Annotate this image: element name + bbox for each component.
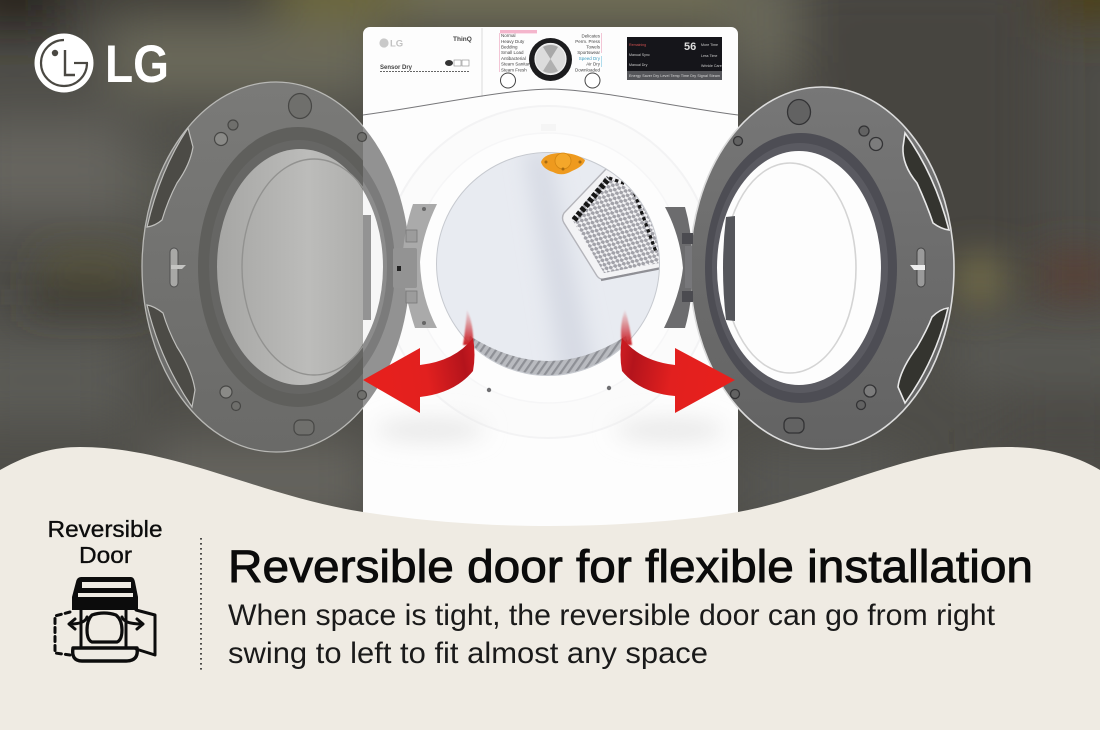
right cycle list: Sportswear bbox=[577, 50, 600, 55]
door catch bbox=[541, 124, 556, 131]
door surround bbox=[375, 106, 725, 442]
left button bbox=[500, 73, 516, 88]
display panel: Manual Dry bbox=[629, 63, 648, 67]
description text: swing to left to fit almost any space bbox=[228, 637, 708, 670]
ThinQ label: ThinQ bbox=[453, 36, 472, 43]
right cycle list bbox=[575, 33, 602, 72]
inner door tab bbox=[723, 216, 735, 321]
left door latch bbox=[170, 248, 186, 287]
left red arrow bbox=[363, 310, 474, 413]
right cycle list: Towels bbox=[586, 44, 601, 50]
dryer body bbox=[363, 27, 738, 537]
right cycle list: Speed Dry bbox=[579, 56, 601, 61]
left cycle list: Antibacterial bbox=[501, 56, 526, 61]
left cycle list: Bedding bbox=[501, 44, 518, 50]
left cycle list: Small Load bbox=[501, 50, 524, 55]
left cycle list bbox=[500, 30, 537, 72]
front screw right bbox=[607, 386, 611, 390]
LG wordmark: LG bbox=[105, 35, 169, 94]
display panel: Wrinkle Care bbox=[701, 64, 722, 68]
front screw left bbox=[487, 388, 491, 392]
bottom grille bbox=[470, 336, 627, 375]
orange sensor bbox=[541, 153, 585, 174]
right hinge bracket bbox=[664, 207, 693, 328]
right door bolts bbox=[730, 100, 882, 433]
right door bbox=[664, 87, 954, 449]
top grip bbox=[903, 133, 949, 230]
display panel: Energy Saver Dry Level Temp Time Dry Signal Steam bbox=[629, 74, 720, 78]
left door part over dryer bbox=[363, 126, 408, 408]
lint filter bbox=[562, 169, 664, 280]
left cycle list: Steam Fresh bbox=[501, 68, 527, 72]
right button bbox=[585, 73, 600, 88]
Sensor Dry label: Sensor Dry bbox=[380, 65, 413, 71]
LG logo bbox=[34, 34, 169, 94]
dryer body and doors bbox=[55, 609, 155, 661]
bottom grip bbox=[898, 308, 948, 403]
dotted divider bbox=[200, 538, 202, 672]
small LG mark bbox=[379, 38, 403, 50]
dial knob bbox=[529, 38, 572, 81]
cream wave panel bbox=[0, 447, 1100, 730]
drum opening bbox=[436, 150, 664, 392]
display panel: Manual Sync bbox=[629, 53, 650, 57]
right cycle list: Air Dry bbox=[586, 62, 601, 67]
display panel: More Time bbox=[701, 43, 718, 47]
left hinge bracket bbox=[393, 204, 437, 328]
display panel: 56 bbox=[684, 41, 696, 53]
small LG mark: LG bbox=[390, 38, 403, 50]
left door bbox=[142, 82, 437, 452]
left door part over background bbox=[141, 81, 363, 453]
right cycle list: Delicates bbox=[581, 34, 601, 38]
LG emblem bbox=[34, 34, 94, 92]
right door latch bbox=[910, 248, 925, 287]
left cycle list: Steam Sanitary+ bbox=[501, 62, 535, 67]
display panel: Remaining bbox=[629, 43, 646, 47]
right cycle list: Perm. Press bbox=[575, 39, 601, 44]
control panel bbox=[363, 28, 738, 115]
description text bbox=[228, 599, 995, 670]
feature label bbox=[48, 516, 162, 568]
left cycle list: Normal bbox=[501, 33, 516, 38]
Sensor Dry label bbox=[380, 60, 470, 72]
feature label: Door bbox=[79, 542, 132, 568]
right red arrow bbox=[620, 310, 735, 413]
left door bolts bbox=[214, 94, 366, 435]
display panel bbox=[627, 37, 722, 80]
feature label: Reversible bbox=[48, 516, 162, 542]
display panel: Less Time bbox=[701, 54, 717, 58]
left cycle list: Heavy Duty bbox=[501, 39, 525, 44]
icon: reversible door dryer bbox=[55, 577, 155, 661]
drum shading band bbox=[527, 154, 592, 360]
right cycle list: Downloaded bbox=[575, 68, 600, 72]
description text: When space is tight, the reversible door can go from right bbox=[228, 599, 995, 632]
dryer top bbox=[72, 577, 138, 610]
heading: Reversible door for flexible installation bbox=[228, 541, 1033, 592]
